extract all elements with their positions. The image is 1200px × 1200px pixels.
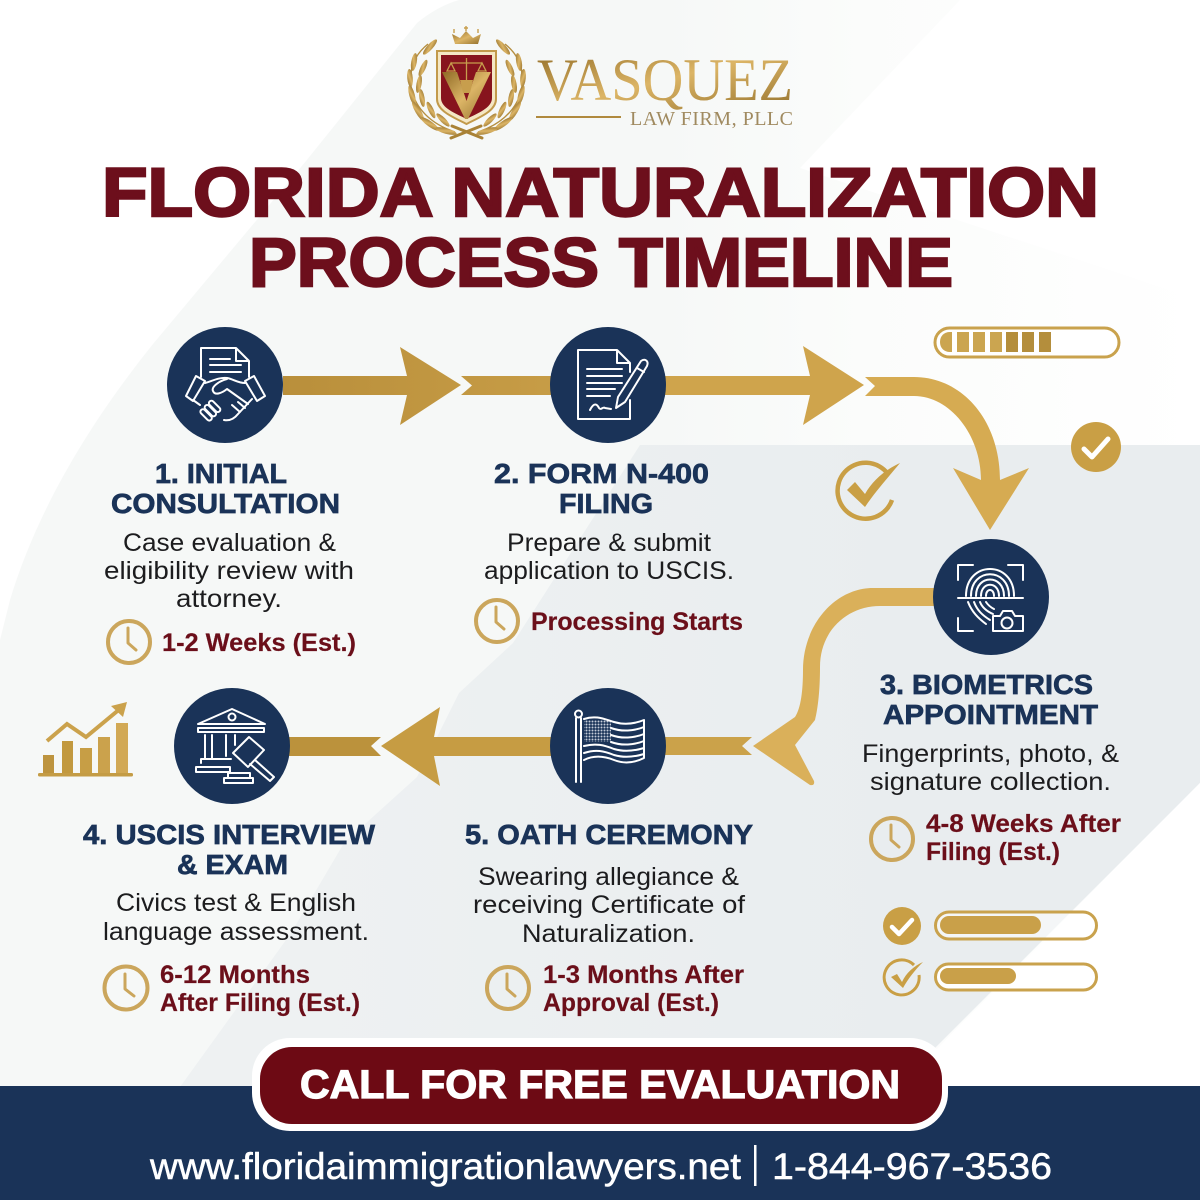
step description: signature collection. [870,768,1111,796]
icon: courthouse and gavel [174,688,290,804]
step description: Naturalization. [522,920,695,948]
icon: filled check badge [1071,422,1121,472]
step heading [880,669,1098,730]
icon: wreath right [451,38,527,138]
step heading: 1. INITIAL [155,458,287,489]
estimated time: 6-12 Months [160,961,310,989]
step description: eligibility review with [104,557,354,585]
icon: handshake and document [167,327,283,443]
step heading [494,458,709,519]
logo [406,26,793,138]
icon: signed form and pen [550,327,666,443]
icon: fingerprint and camera [933,539,1049,655]
icon: crown [452,26,481,44]
footer band [0,1086,1200,1200]
title [102,154,1099,301]
icon: check with progress bar, upper [883,907,1096,945]
step heading: CONSULTATION [111,488,340,519]
step description: Prepare & submit [507,529,711,557]
arrow: step 3 to 5 [665,588,935,785]
step heading: FILING [559,488,653,519]
contact phone: 1-844-967-3536 [772,1146,1052,1187]
icon: clock [487,967,529,1009]
estimated time: 1-2 Weeks (Est.) [162,629,356,657]
contact website: www.floridaimmigrationlawyers.net [149,1146,742,1187]
title: PROCESS TIMELINE [249,224,953,301]
icon: clock [871,818,913,860]
step heading: 3. BIOMETRICS [880,669,1093,700]
panel: step 4 [83,688,376,1017]
call to action button [252,1038,948,1131]
step heading: 4. USCIS INTERVIEW [83,819,376,850]
icon: american flag [550,688,666,804]
icon: growth chart [38,702,133,776]
step description: attorney. [176,585,282,613]
estimated time: Processing Starts [531,608,743,636]
step description [473,863,745,948]
step description [862,740,1119,796]
step description: language assessment. [103,918,369,946]
icon: segmented progress bar [935,328,1119,357]
step heading: APPOINTMENT [883,699,1098,730]
panel: step 3 [862,539,1121,866]
brand name: VASQUEZ [537,47,793,113]
contact divider [754,1145,756,1186]
step heading [111,458,340,519]
icon: clock [476,600,518,642]
brand subtitle: LAW FIRM, PLLC [630,108,793,130]
step heading: & EXAM [177,849,288,880]
icon: check with progress bar, lower [884,960,1096,995]
step description [484,529,734,585]
estimated time: Approval (Est.) [543,989,719,1017]
icon: wreath left [406,38,482,138]
step description: Fingerprints, photo, & [862,740,1119,768]
step heading: 2. FORM N-400 [494,458,709,489]
step description: Swearing allegiance & [478,863,739,891]
step description [103,889,369,946]
estimated time: Filing (Est.) [926,838,1060,866]
step description [104,529,354,613]
icon: ring check [838,463,900,519]
arrow: step 2 to 3 [665,346,1029,530]
step heading [83,819,376,880]
panel: step 5 [465,688,753,1017]
estimated time [543,961,744,1017]
arrow: step 1 to 2 [283,347,552,425]
step description: Case evaluation & [123,529,336,557]
estimated time: 4-8 Weeks After [926,810,1121,838]
panel: step 2 [476,327,743,642]
estimated time: 1-3 Months After [543,961,744,989]
estimated time [160,961,360,1017]
step description: Civics test & English [116,889,356,917]
step heading: 5. OATH CEREMONY [465,819,753,850]
icon: clock [104,966,148,1010]
icon: clock [108,621,150,663]
icon: shield [437,51,496,124]
panel: step 1 [104,327,356,663]
estimated time [926,810,1121,866]
arrow: step 5 to 4 [289,707,552,786]
step description: receiving Certificate of [473,891,745,919]
call to action button: CALL FOR FREE EVALUATION [300,1063,900,1107]
estimated time: After Filing (Est.) [160,989,360,1017]
step description: application to USCIS. [484,557,734,585]
divider line [536,116,621,118]
title: FLORIDA NATURALIZATION [102,154,1099,231]
